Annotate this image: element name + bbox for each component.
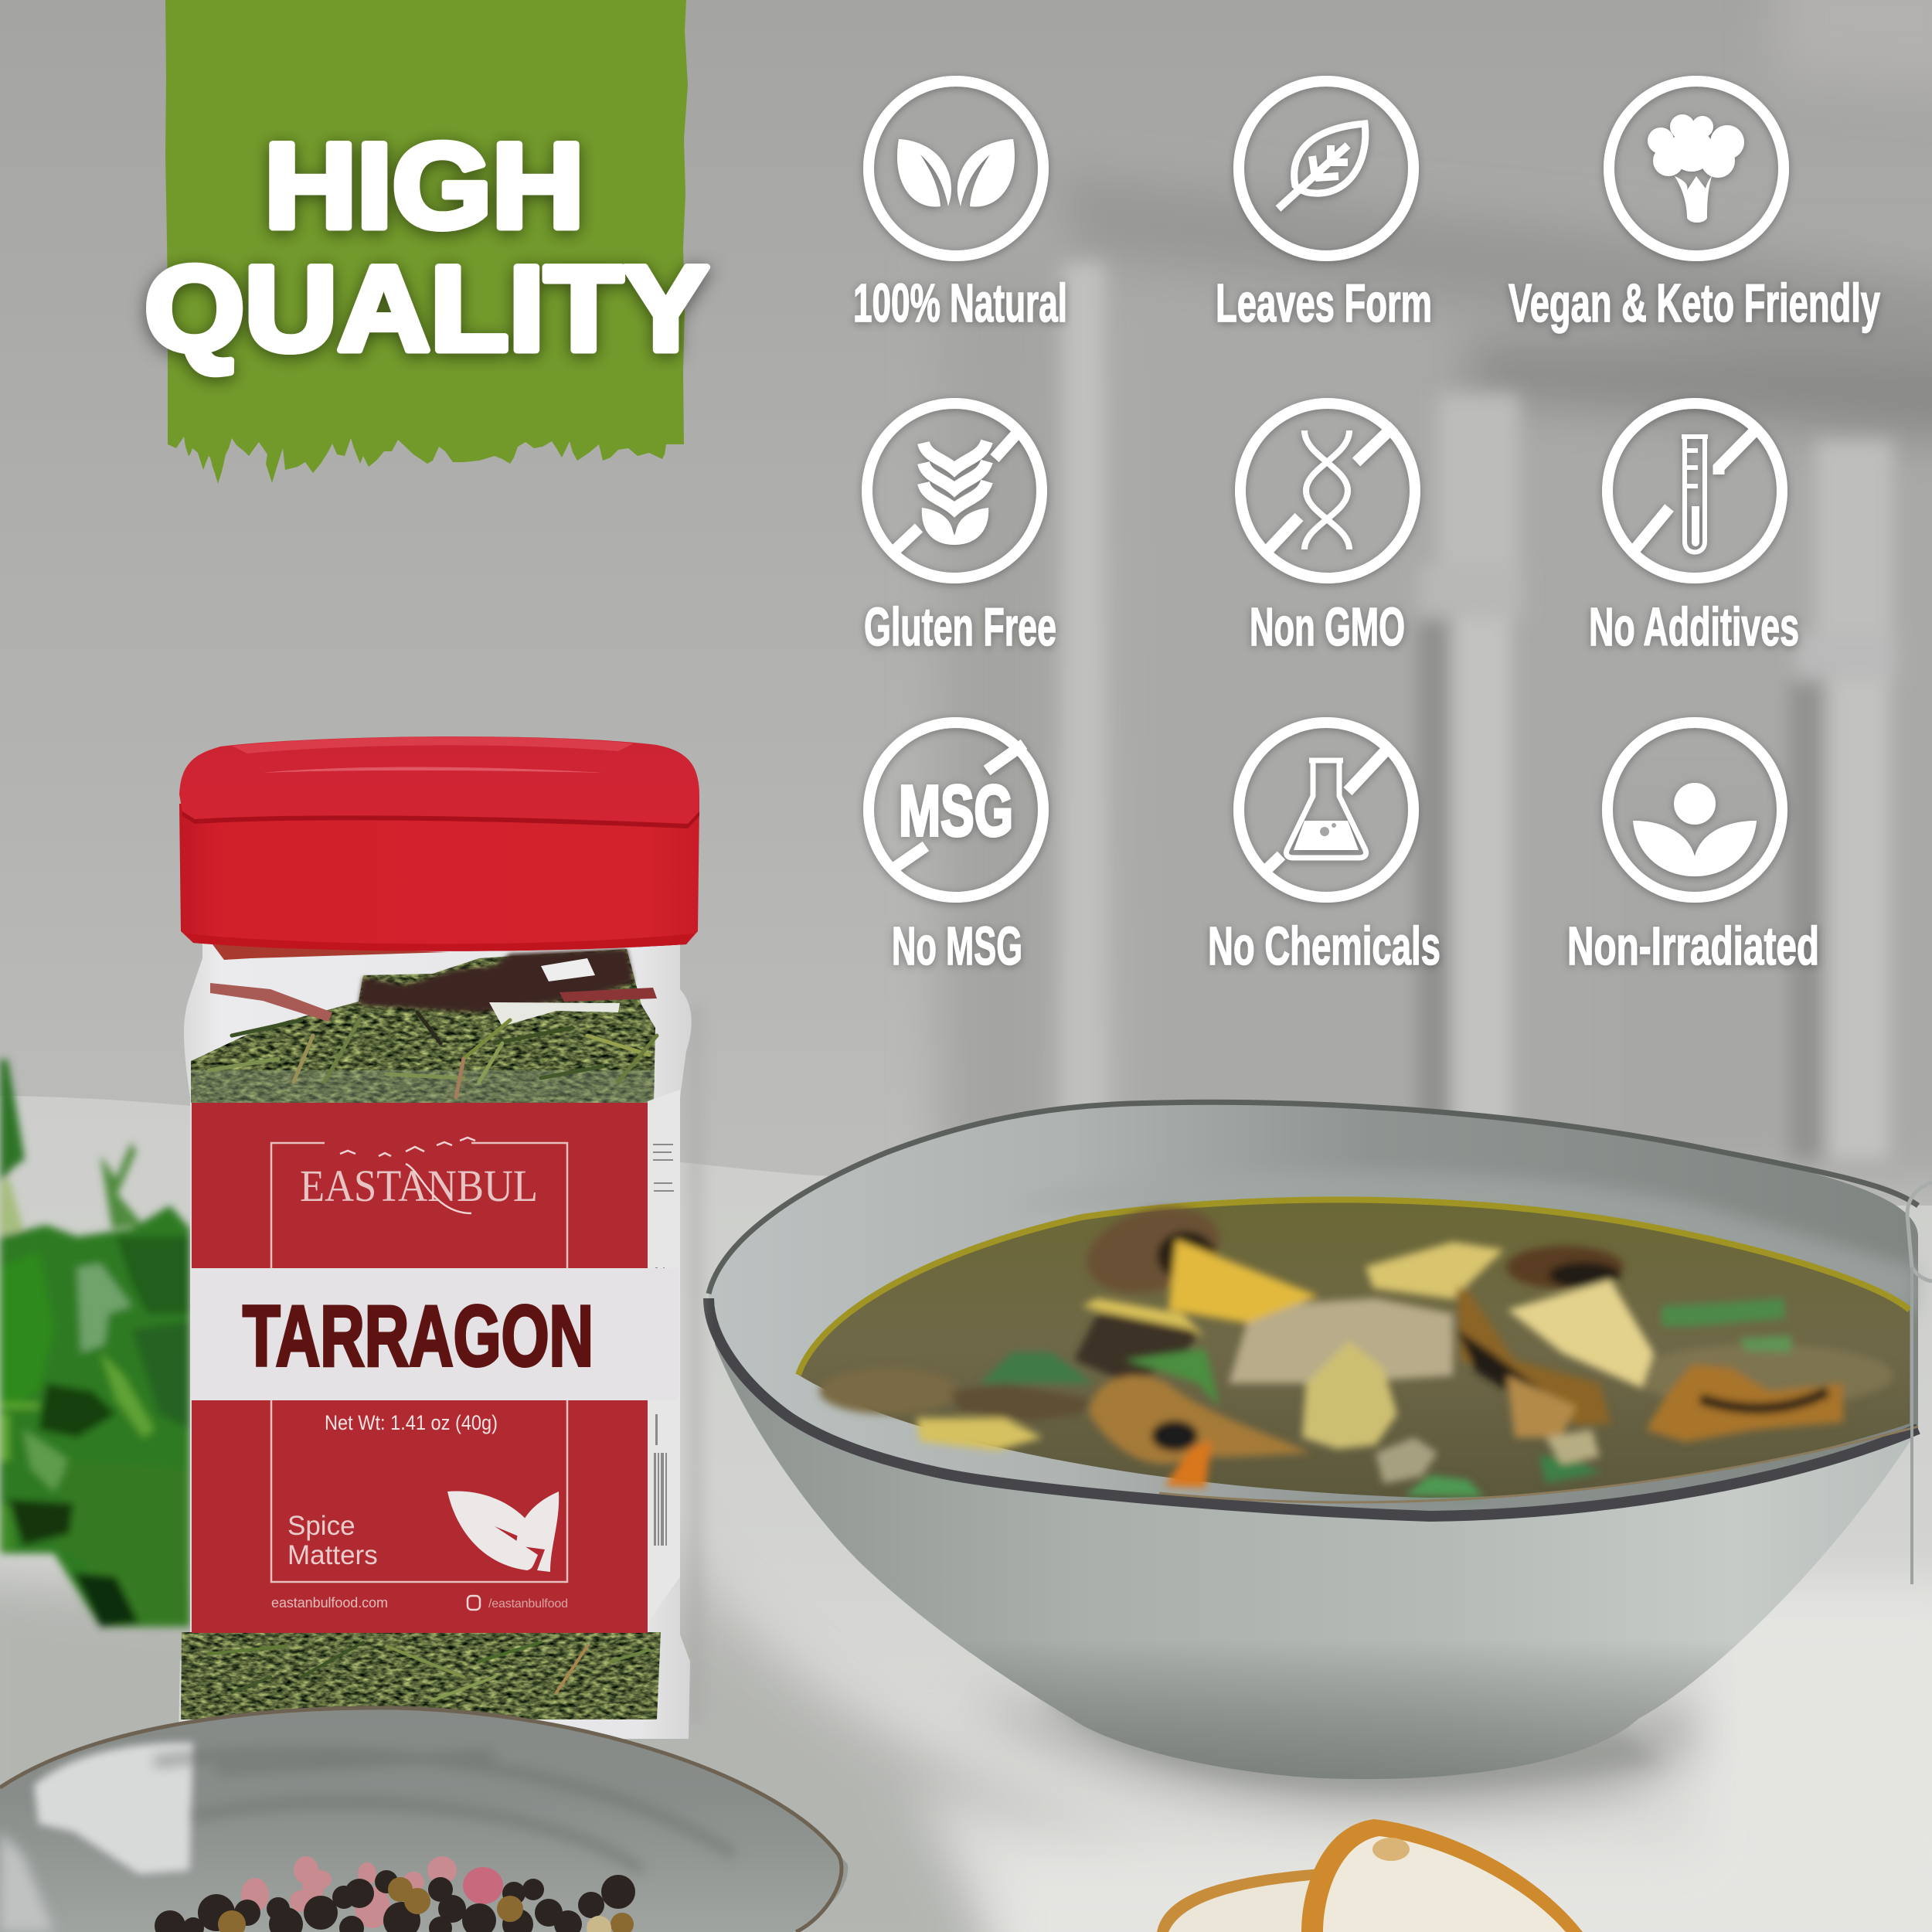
icon: crossed msg: MSG [899,770,1013,851]
inner bowl light ring [1005,1171,1917,1314]
feature: no additives [1589,403,1799,657]
swoosh and birds [340,1138,475,1213]
label: Non GMO [1250,597,1405,657]
white name band [190,1268,679,1400]
red label [192,1103,648,1633]
feature grid [853,81,1880,976]
brand logo [300,1138,538,1213]
bowl body [715,1314,1918,1779]
label: Leaves Form [1216,273,1432,333]
icon: crossed dna [1240,403,1415,578]
lower herbs [181,1632,661,1719]
bowl shadow [1043,1685,1662,1793]
reflection streaks [210,983,332,1022]
soup bowl [709,1102,1918,1793]
spice jar [179,736,703,1739]
icon: leaf outline [1239,81,1413,256]
icon: two leaves [869,81,1043,256]
icon: crossed flask [1239,723,1413,897]
icon: crossed test tube [1607,403,1782,578]
plate [0,1708,848,1932]
feature: non gmo [1240,403,1415,657]
label: Gluten Free [864,597,1056,657]
label: 100% Natural [853,273,1067,333]
feature: gluten free [864,403,1056,657]
plate rim [0,1708,842,1932]
net weight: Net Wt: 1.41 oz (40g) [325,1411,498,1434]
bowl rim top edge [709,1102,1918,1294]
plate with peppercorns [0,1708,848,1932]
drinking glass at right edge [1907,1182,1932,1584]
bowl interior [709,1102,1918,1518]
feature: non irradiated [1567,723,1819,976]
front bread slice [1301,1819,1583,1932]
glass shoulder [179,941,692,1739]
tagline: Matters [287,1540,378,1570]
dark top leaves [359,949,634,1012]
product name: TARRAGON [243,1288,594,1384]
label leaf icon [447,1492,559,1572]
icon: broccoli [1609,81,1784,256]
peppercorns [155,1856,635,1932]
bowl front rim [709,1298,1918,1516]
banner: torn green label [165,0,688,484]
glaze rings [155,1753,734,1870]
parsley herbs [0,1059,190,1627]
tablecloth [0,1096,1932,1932]
soup ingredients [819,1194,1893,1497]
soup [798,1194,1910,1498]
glaze highlight [34,1743,193,1874]
jar shadow [688,1005,703,1723]
feature: no chemicals [1208,723,1440,976]
glass band over herbs [191,1070,654,1103]
back bread slice [1157,1869,1337,1932]
label: No Chemicals [1208,916,1440,976]
icon: figure with leaves [1607,723,1782,897]
title: high quality: QUALITY [145,242,709,376]
title: high quality [145,119,709,376]
jar lid [179,736,699,951]
icon: crossed msg [869,723,1043,897]
icon: crossed wheat [867,403,1042,578]
feature: no msg [869,723,1043,976]
upper herbs [191,944,657,1103]
title: high quality: HIGH [264,119,584,253]
label: Non-Irradiated [1567,916,1819,976]
feature: 100% natural [853,81,1067,333]
logo frame [271,1143,567,1582]
website: eastanbulfood.com [271,1595,388,1611]
label: No MSG [892,916,1022,976]
feature: vegan and keto [1509,81,1880,333]
side panel of label [648,1090,680,1623]
bread slices [1157,1819,1583,1932]
feature: leaves form [1216,81,1432,333]
social handle: /eastanbulfood [488,1597,568,1611]
tagline: Spice [287,1511,355,1541]
brand logo: EASTANBUL [300,1161,538,1211]
barcode and fine print [653,1144,674,1546]
label: No Additives [1589,597,1799,657]
